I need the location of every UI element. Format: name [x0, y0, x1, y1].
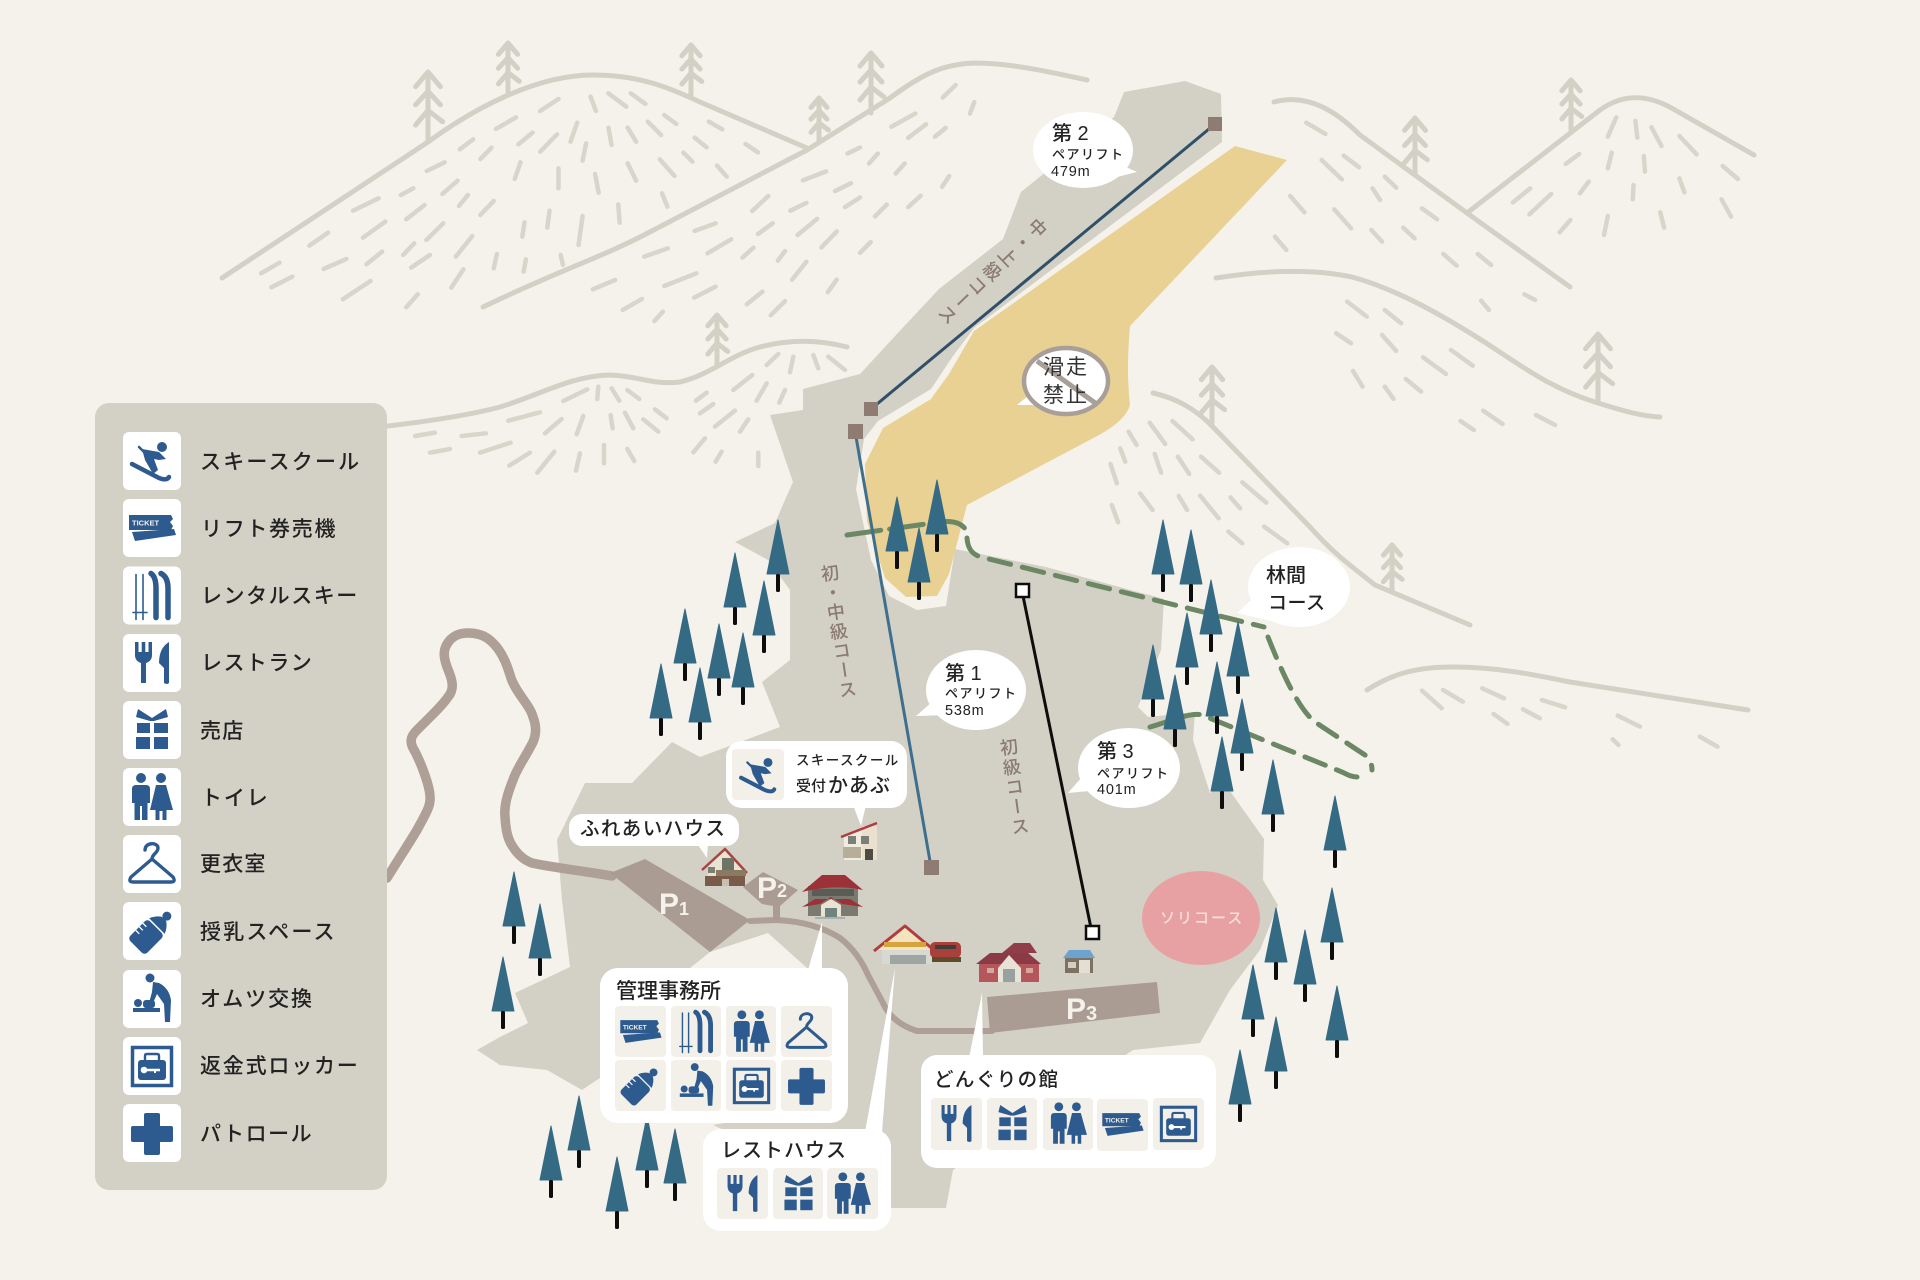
legend item: rental ski: レンタルスキー [201, 585, 359, 608]
parking P3 [987, 982, 1160, 1033]
callout: lift 3 [1068, 728, 1180, 808]
legend item: toilet [123, 768, 270, 826]
legend item: nursing space: 授乳スペース [200, 921, 337, 944]
panel: rest house: レストハウス [721, 1140, 847, 1162]
sled course [1142, 871, 1260, 965]
callout: no skiing sign [1017, 348, 1108, 414]
building: fureai house [702, 849, 747, 886]
callout: ski school reception [726, 741, 907, 826]
legend item: refundable locker: 返金式ロッカー [200, 1055, 360, 1078]
lift 2 [864, 117, 1222, 416]
legend item: ski school [123, 432, 361, 490]
legend item: diaper changing [123, 970, 314, 1028]
building: ski school kaabu [841, 823, 877, 860]
callout: lift 3: 401m [1097, 782, 1136, 798]
callout: lift 3: ペアリフト [1097, 766, 1170, 781]
legend item: changing room [123, 835, 267, 893]
legend item: patrol [123, 1104, 313, 1162]
building: rest house [874, 926, 961, 964]
legend item: shop: 売店 [200, 720, 244, 743]
parking P1: 1 [679, 899, 689, 919]
course label: beginner-intermediate: 初・中級コース [818, 562, 858, 701]
background hills [222, 63, 1754, 747]
legend item: restaurant: レストラン [201, 652, 313, 675]
parking P1: P [659, 888, 679, 921]
legend item: changing room: 更衣室 [200, 853, 267, 876]
course label: intermediate-advanced: 中・上級コース [932, 213, 1051, 329]
building: donguri hall [976, 943, 1041, 982]
parking P3: 3 [1086, 1003, 1097, 1025]
restricted area: no skiing [865, 146, 1287, 597]
building: management office [802, 875, 863, 919]
panel: rest house [703, 968, 895, 1231]
callout: lift 1: ペアリフト [945, 686, 1018, 701]
callout: lift 1 [916, 650, 1026, 730]
sketch trees on the hills [416, 43, 1613, 592]
legend item: ski school: スキースクール [200, 451, 361, 474]
legend item: rental ski [123, 566, 359, 624]
parking P2: P [757, 872, 777, 905]
callout: ski school reception: スキースクール [796, 753, 900, 768]
panel: donguri hall: どんぐりの館 [934, 1069, 1059, 1091]
lift 1 [848, 424, 939, 875]
ski slope area [477, 81, 1278, 1208]
parking P3: P [1066, 993, 1086, 1026]
legend item: lift ticket machine [123, 499, 337, 557]
legend item: diaper changing: オムツ交換 [200, 988, 314, 1011]
callout: lift 2: 479m [1051, 164, 1090, 180]
callout: lift 2 [1033, 112, 1137, 188]
panel: management office [600, 922, 848, 1123]
sled course: ソリコース [1160, 910, 1244, 927]
panel: legend [95, 403, 387, 1190]
legend item: refundable locker [123, 1037, 360, 1095]
lift 3 [1016, 584, 1099, 939]
callout: lift 3: 第 3 [1097, 740, 1134, 763]
callout: fureai house: ふれあいハウス [580, 818, 726, 840]
callout: ski school reception: 受付 [796, 777, 826, 795]
road [387, 633, 992, 1031]
panel: management office: 管理事務所 [616, 980, 721, 1003]
legend item: nursing space [123, 902, 337, 960]
callout: forest course [1237, 547, 1350, 627]
legend item: restaurant [123, 634, 313, 692]
legend item: shop [123, 701, 244, 759]
callout: ski school reception: かあぶ [828, 774, 891, 797]
course label: beginner: 初級コース [997, 737, 1031, 839]
callout: lift 2: 第 2 [1052, 122, 1089, 145]
callout: forest course: コース [1268, 593, 1326, 614]
building: small blue hut [1063, 950, 1095, 973]
callout: lift 2: ペアリフト [1052, 147, 1125, 162]
callout: lift 1: 第 1 [945, 662, 982, 685]
parking P1 [610, 859, 750, 952]
legend item: lift ticket machine: リフト券売機 [201, 518, 337, 541]
panel: donguri hall [921, 993, 1216, 1168]
trees [492, 480, 1348, 1229]
callout: fureai house [569, 814, 739, 858]
legend item: toilet: トイレ [201, 787, 270, 810]
parking P2 [743, 872, 798, 920]
callout: no skiing sign: 滑走 [1043, 356, 1089, 379]
callout: forest course: 林間 [1266, 564, 1306, 587]
legend item: patrol: パトロール [200, 1123, 313, 1146]
parking P2: 2 [777, 881, 787, 901]
forest course dashed line [847, 521, 1372, 777]
callout: lift 1: 538m [945, 703, 984, 719]
callout: no skiing sign: 禁止 [1043, 384, 1089, 407]
